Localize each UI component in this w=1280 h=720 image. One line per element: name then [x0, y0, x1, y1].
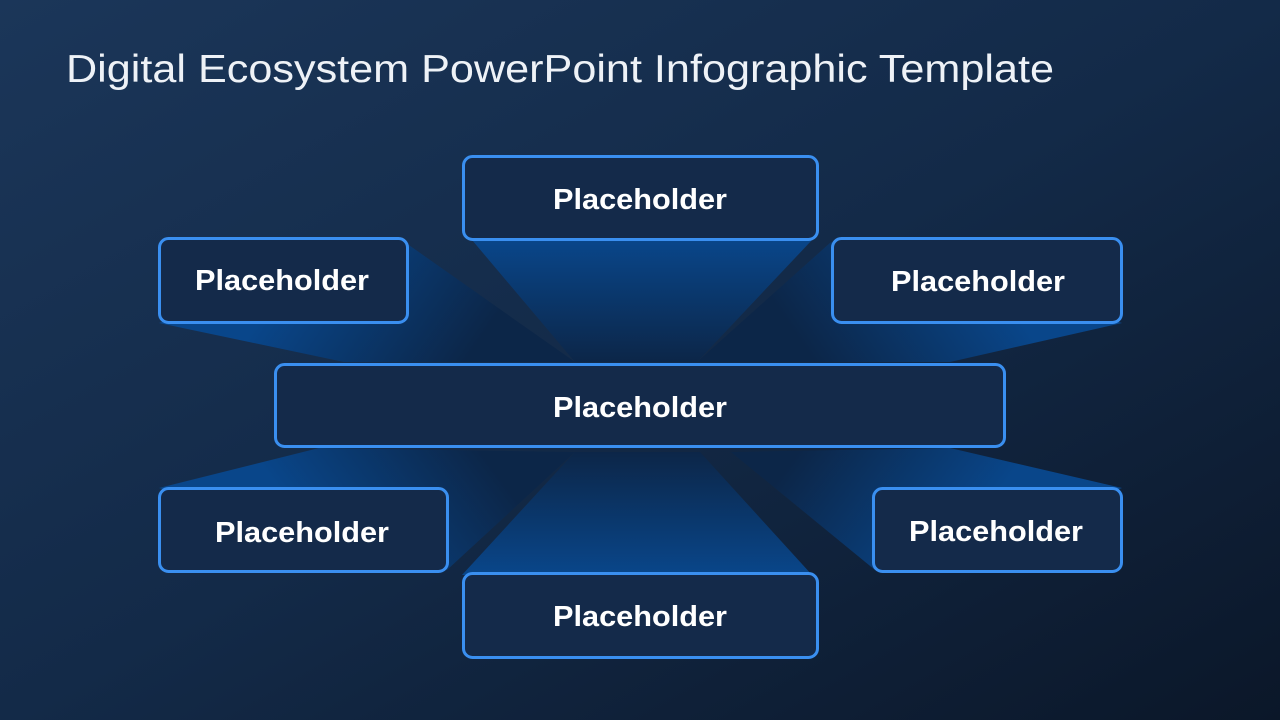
box: top: Placeholder [553, 184, 727, 216]
box: bottom-right [874, 488, 1122, 572]
box: bottom-left: Placeholder [215, 517, 389, 549]
title: Digital Ecosystem PowerPoint Infographic Template [66, 48, 1054, 91]
box: center [276, 364, 1004, 446]
box: bottom-left [160, 488, 448, 572]
box: top-right: Placeholder [891, 266, 1065, 298]
beams [159, 240, 1122, 575]
box: bottom: Placeholder [553, 601, 727, 633]
box: top-right [832, 238, 1122, 322]
box: bottom [464, 574, 818, 658]
box: top-left: Placeholder [195, 265, 369, 297]
box: bottom-right: Placeholder [909, 516, 1083, 548]
box: top-left [160, 238, 408, 322]
box: top [464, 156, 818, 240]
box: center: Placeholder [553, 392, 727, 424]
